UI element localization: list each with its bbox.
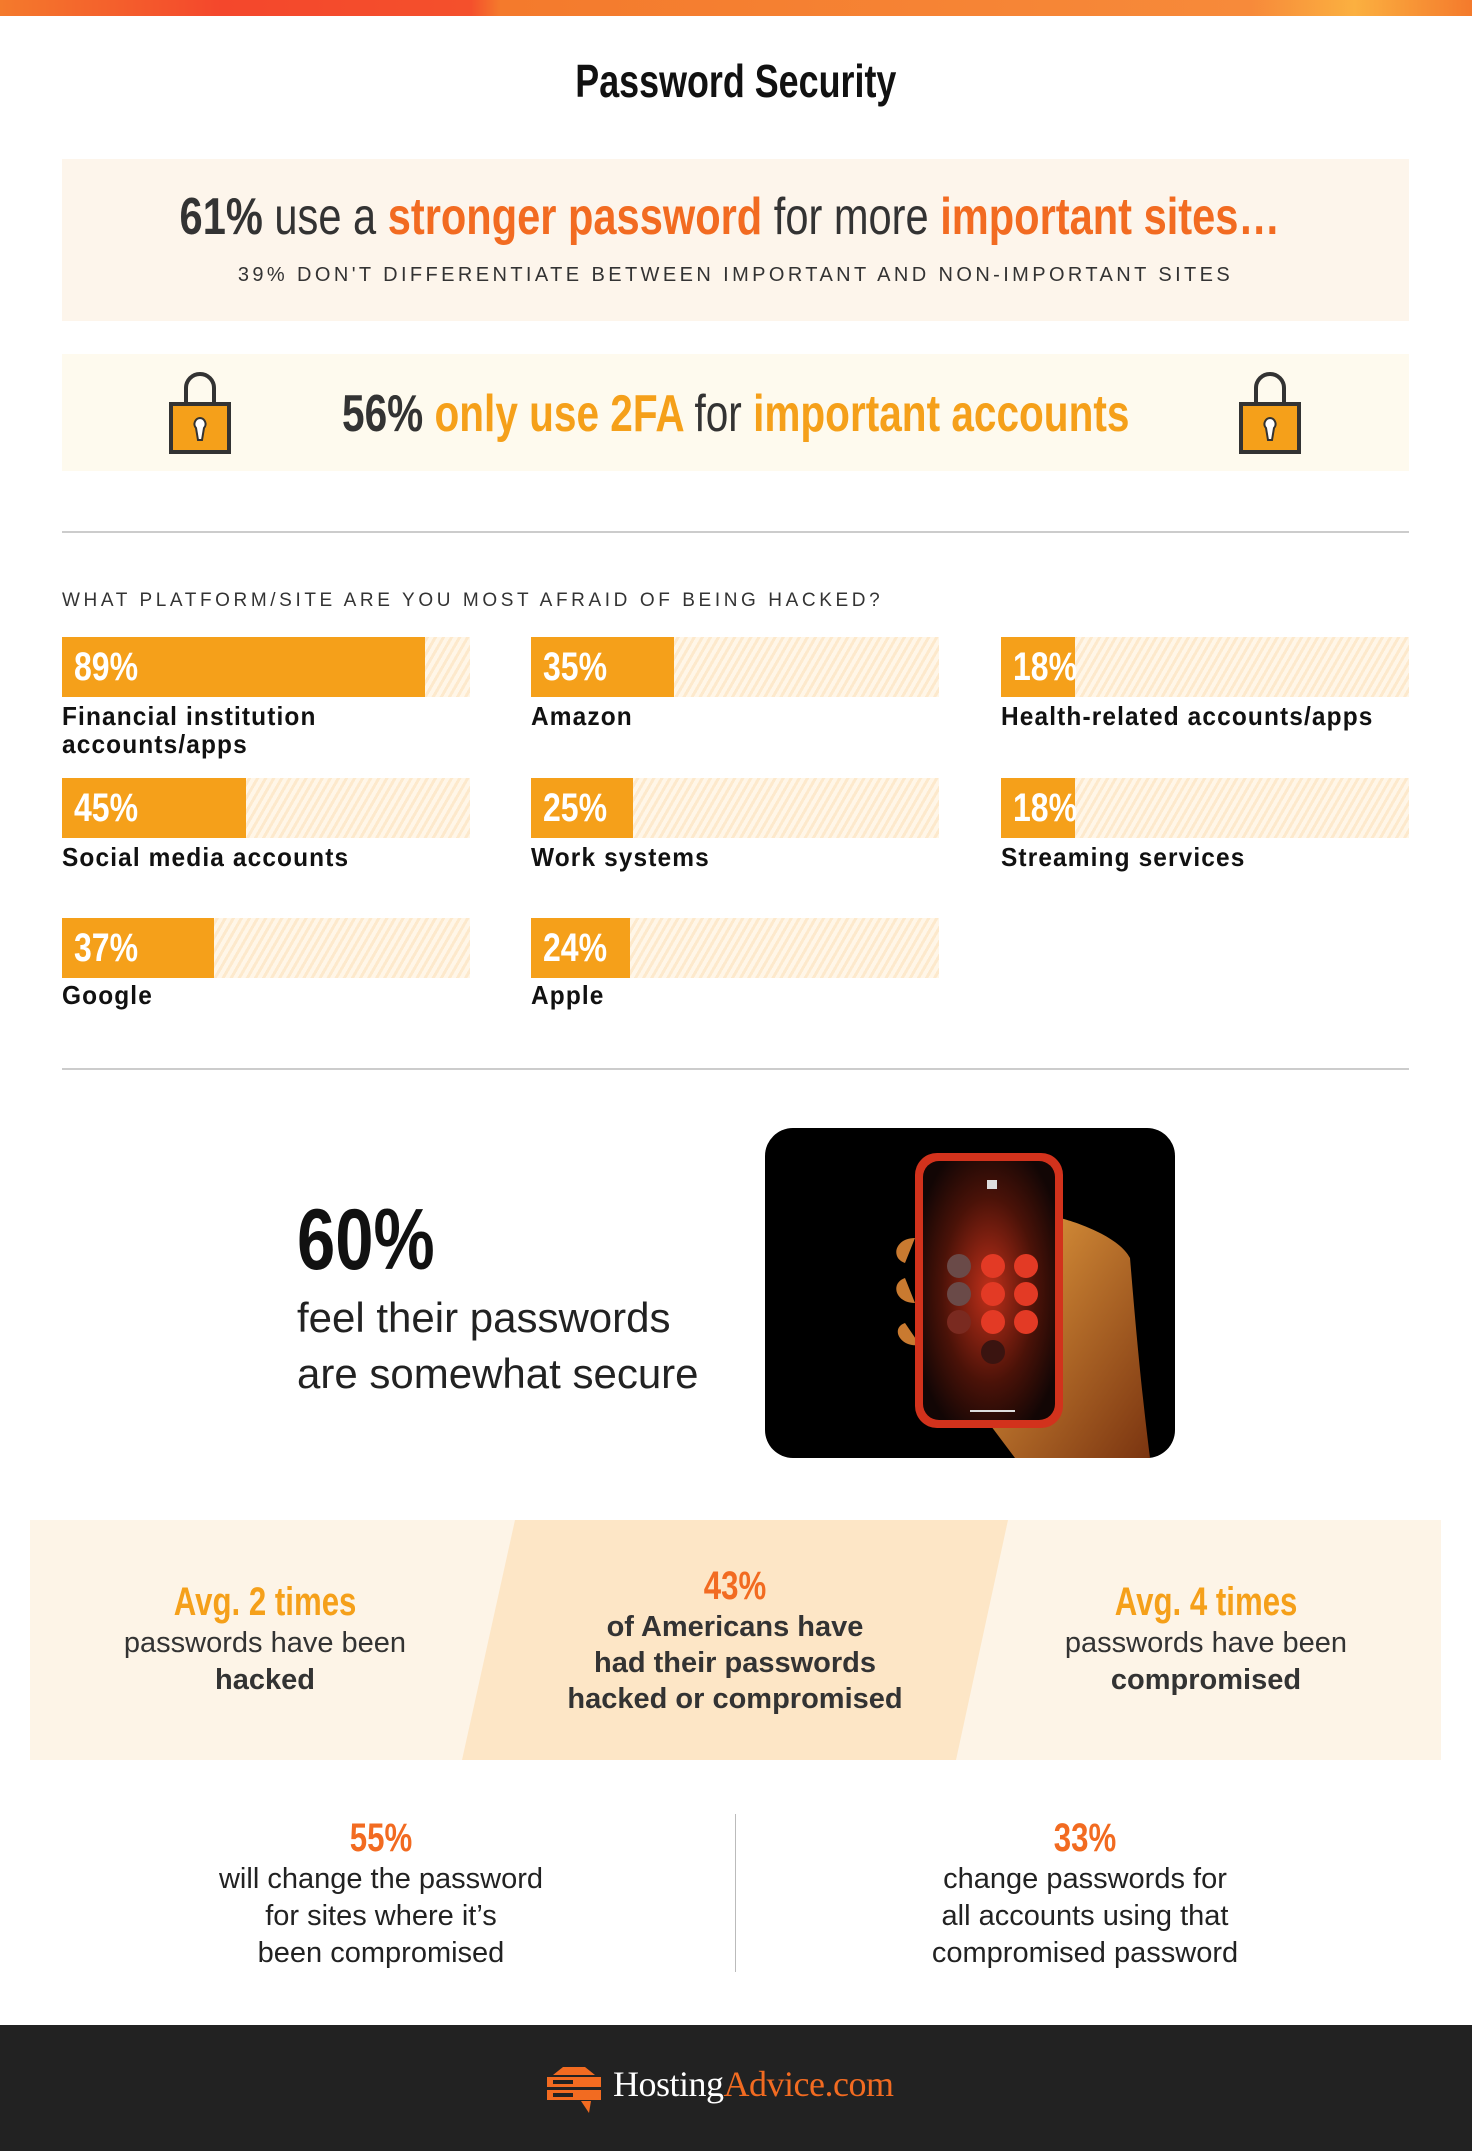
panel: stronger password bbox=[62, 159, 1409, 321]
stat: 43%: 43% bbox=[704, 1564, 766, 1608]
bar: apple 24% bbox=[531, 918, 939, 1010]
icon: lock right bbox=[1239, 372, 1301, 454]
headline 56%: 56% only use 2FA for important accounts bbox=[342, 385, 1129, 443]
stat: 55%: 55% bbox=[350, 1816, 412, 1860]
stat 60%: 60% bbox=[297, 1192, 435, 1288]
panel: 2FA bbox=[62, 354, 1409, 471]
title: Password Security bbox=[575, 55, 897, 107]
bar: streaming 18%: 18% bbox=[1013, 786, 1077, 830]
question heading: WHAT PLATFORM/SITE ARE YOU MOST AFRAID OF BEING HACKED? bbox=[62, 590, 883, 611]
stat: 55%: been compromised bbox=[258, 1937, 504, 1969]
logo: HostingAdvice.com bbox=[613, 2064, 893, 2104]
photo: hand holding phone bbox=[765, 1128, 1175, 1458]
stat: 33%: change passwords for bbox=[943, 1863, 1227, 1895]
stat 60%: feel their passwords bbox=[297, 1294, 671, 1341]
icon: lock left bbox=[169, 372, 231, 454]
stat: 55%: will change the password bbox=[219, 1863, 543, 1895]
bar: streaming 18% bbox=[1001, 778, 1409, 872]
stat: 55%: for sites where it’s bbox=[265, 1900, 497, 1932]
stat: avg 4 times: compromised bbox=[1111, 1664, 1301, 1696]
stat: 43%: hacked or compromised bbox=[567, 1683, 903, 1715]
bar: work 25% bbox=[531, 778, 939, 872]
band: hacked stats bbox=[30, 1520, 1441, 1760]
bar: work 25%: Work systems bbox=[531, 842, 710, 872]
headline 61%: 61% use a stronger password for more important sites… bbox=[180, 188, 1280, 246]
bar: amazon 35%: 35% bbox=[543, 645, 607, 689]
stat: avg 2 times: passwords have been bbox=[124, 1627, 406, 1659]
stat: avg 4 times: Avg. 4 times bbox=[1115, 1580, 1297, 1624]
bar: financial 89%: 89% bbox=[74, 645, 138, 689]
bar: apple 24%: 24% bbox=[543, 926, 607, 970]
stat 60%: are somewhat secure bbox=[297, 1350, 699, 1397]
stat: avg 2 times: Avg. 2 times bbox=[174, 1580, 356, 1624]
bar: apple 24%: Apple bbox=[531, 980, 605, 1010]
stat: 33% bbox=[932, 1816, 1238, 1969]
bar: google 37%: Google bbox=[62, 980, 153, 1010]
stat: 43%: had their passwords bbox=[594, 1647, 876, 1679]
bar: financial 89%: Financial institution bbox=[62, 701, 317, 731]
bar: financial 89%: accounts/apps bbox=[62, 729, 248, 759]
top gradient bar bbox=[0, 0, 1472, 16]
stat 60% bbox=[297, 1192, 699, 1397]
footer bbox=[0, 2025, 1472, 2151]
stat: avg 4 times: passwords have been bbox=[1065, 1627, 1347, 1659]
bar: amazon 35% bbox=[531, 637, 939, 731]
bar: work 25%: 25% bbox=[543, 786, 607, 830]
icon: server bbox=[547, 2067, 601, 2113]
logo bbox=[547, 2064, 894, 2113]
bar: health 18%: 18% bbox=[1013, 645, 1077, 689]
bar: google 37%: 37% bbox=[74, 926, 138, 970]
stat: 33%: all accounts using that bbox=[942, 1900, 1228, 1932]
bar: social 45%: Social media accounts bbox=[62, 842, 349, 872]
bar: financial 89% bbox=[62, 637, 470, 759]
stat: avg 2 times: hacked bbox=[215, 1664, 315, 1696]
bar: google 37% bbox=[62, 918, 470, 1010]
bar: amazon 35%: Amazon bbox=[531, 701, 633, 731]
stat: 33%: 33% bbox=[1054, 1816, 1116, 1860]
subtext 39%: 39% DON'T DIFFERENTIATE BETWEEN IMPORTANT AND NON-IMPORTANT SITES bbox=[238, 264, 1233, 286]
stat: 55% bbox=[219, 1816, 543, 1969]
stat: 43% bbox=[567, 1564, 903, 1715]
bar: social 45% bbox=[62, 778, 470, 872]
stat: avg 4 times bbox=[1065, 1580, 1347, 1696]
bar: health 18%: Health-related accounts/apps bbox=[1001, 701, 1373, 731]
bar chart bbox=[62, 637, 1409, 1010]
bar: social 45%: 45% bbox=[74, 786, 138, 830]
stat: 43%: of Americans have bbox=[607, 1611, 863, 1643]
bar: health 18% bbox=[1001, 637, 1409, 731]
stat: avg 2 times bbox=[124, 1580, 406, 1696]
stat: 33%: compromised password bbox=[932, 1937, 1238, 1969]
bar: streaming 18%: Streaming services bbox=[1001, 842, 1245, 872]
